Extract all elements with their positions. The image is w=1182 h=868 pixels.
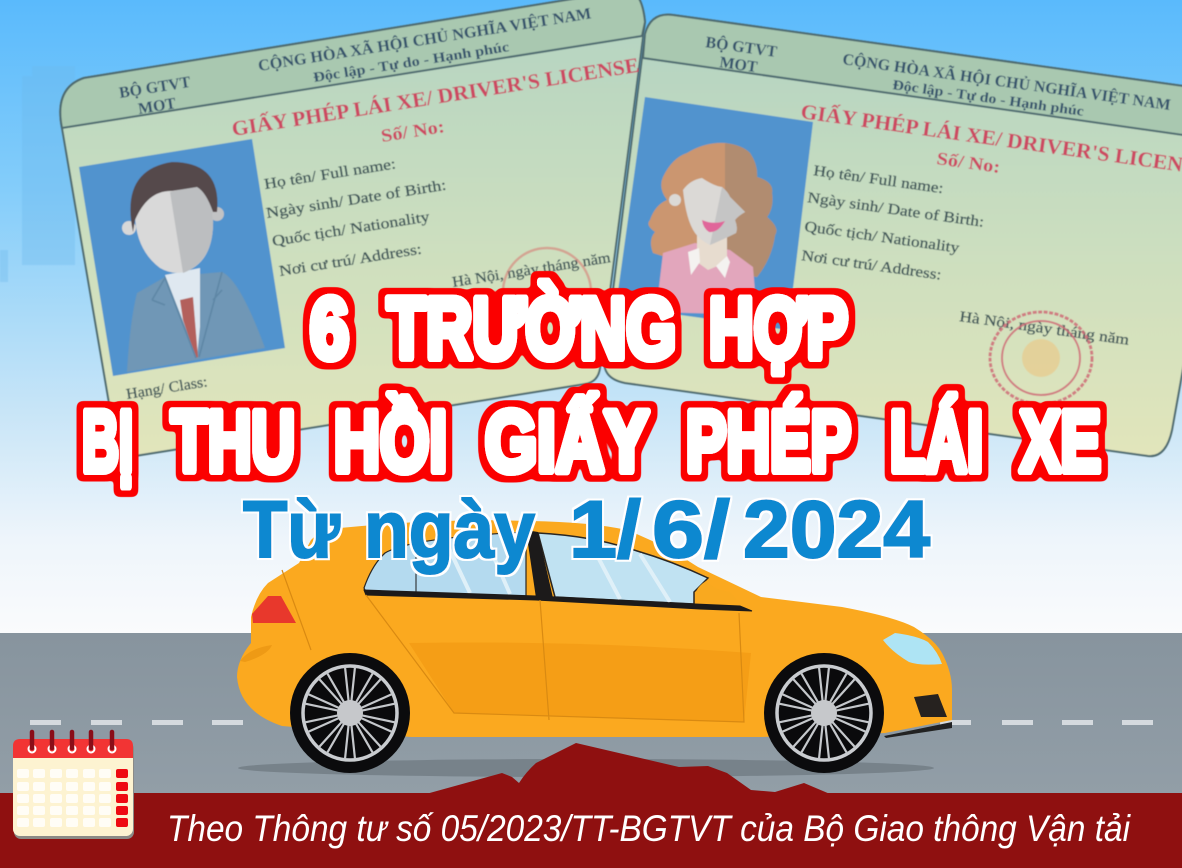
tail light (252, 596, 296, 623)
issuer text: Hà Nội, ngày tháng năm (451, 250, 612, 291)
background: faint building (0, 66, 75, 282)
decorative mountain on footer (426, 743, 830, 794)
car body (237, 520, 952, 737)
calendar rings (28, 746, 116, 752)
portrait: man (79, 139, 285, 376)
issuer text: MOT (718, 54, 759, 76)
subtitle: date: 6/ (652, 485, 730, 575)
title line 1: 6 (310, 281, 349, 377)
issuer text: BỘ GTVT (704, 33, 779, 61)
issuer text: Hà Nội, ngày tháng năm (958, 309, 1130, 349)
rear wheel (290, 653, 410, 773)
card body (604, 15, 1182, 456)
calendar day cells (17, 769, 111, 827)
issuer text: Hạng/ Class: (125, 374, 209, 403)
subtitle: date: 1/ (569, 485, 641, 575)
subtitle: date: 2024 (743, 485, 930, 575)
side mirror (696, 581, 737, 600)
title line 2: HỒI (334, 394, 447, 490)
stamp (503, 248, 591, 336)
title line 2: PHÉP (686, 394, 851, 490)
driver's license card: man (60, 0, 645, 457)
front window (538, 533, 708, 604)
issuer text: Họ tên/ Full name: (812, 163, 944, 197)
subtitle: date: Từ (243, 485, 340, 575)
issuer text: MOT (137, 95, 177, 118)
issuer text: CỘNG HÒA XÃ HỘI CHỦ NGHĨA VIỆT NAM (841, 49, 1172, 114)
issuer text: Số/ No: (935, 148, 1002, 177)
calendar header (13, 739, 133, 758)
title line 2 (82, 394, 1101, 490)
bumper trim (884, 722, 952, 738)
front grille (914, 694, 947, 717)
calendar shadow (14, 742, 134, 839)
subtitle: date: ngày (364, 485, 535, 575)
headlight (883, 633, 942, 665)
lower door panel (409, 642, 751, 722)
title line 2: GIẤY (485, 394, 649, 490)
window glare lines (445, 537, 670, 602)
card body (60, 0, 645, 457)
issuer text: Quốc tịch/ Nationality (803, 219, 961, 257)
portrait: woman (616, 97, 813, 330)
issuer text: Nơi cư trú/ Address: (800, 248, 942, 284)
subtitle: date (243, 485, 930, 575)
car shadow (238, 759, 934, 777)
calendar page (13, 745, 133, 836)
issuer text: GIẤY PHÉP LÁI XE/ DRIVER'S LICENSE (230, 53, 641, 141)
window trim (364, 552, 752, 611)
issuer text: Họ tên/ Full name: (263, 156, 397, 193)
issuer text: Số/ No: (379, 116, 446, 146)
background: sky (0, 0, 1182, 634)
door pillar (526, 530, 553, 598)
footer bar (0, 793, 1182, 868)
issuer text: Ngày sinh/ Date of Birth: (806, 190, 985, 231)
title line 1: TRƯỜNG (387, 281, 676, 377)
title line 2: THU (171, 394, 295, 490)
issuer text: Quốc tịch/ Nationality (271, 209, 431, 250)
driver's license card: woman (604, 15, 1182, 456)
issuer text: Ngày sinh/ Date of Birth: (265, 178, 447, 222)
icon: calendar (13, 732, 134, 839)
door seams (282, 570, 744, 722)
issuer text (118, 3, 641, 403)
issuer text (704, 33, 1182, 349)
card header band (643, 15, 1182, 136)
stamp (990, 312, 1092, 404)
front wheel (764, 653, 884, 773)
issuer text: CỘNG HÒA XÃ HỘI CHỦ NGHĨA VIỆT NAM (257, 3, 592, 75)
road (0, 633, 1182, 795)
car (237, 520, 952, 773)
title line 2: BỊ (82, 394, 133, 490)
rear window (364, 532, 526, 596)
issuer text: Độc lập - Tự do - Hạnh phúc (891, 78, 1085, 120)
bumper crease (240, 645, 272, 662)
title line 2: XE (1020, 394, 1101, 490)
road lane dashes (30, 720, 1153, 725)
calendar binder pins (32, 732, 112, 748)
card header band (60, 0, 645, 128)
calendar highlighted cells (116, 769, 128, 827)
issuer text: BỘ GTVT (118, 73, 192, 102)
title line 1: HỢP (709, 281, 848, 377)
issuer text: Độc lập - Tự do - Hạnh phúc (312, 40, 510, 86)
issuer text: Nơi cư trú/ Address: (278, 242, 423, 280)
title line 2: LÁI (890, 394, 983, 490)
